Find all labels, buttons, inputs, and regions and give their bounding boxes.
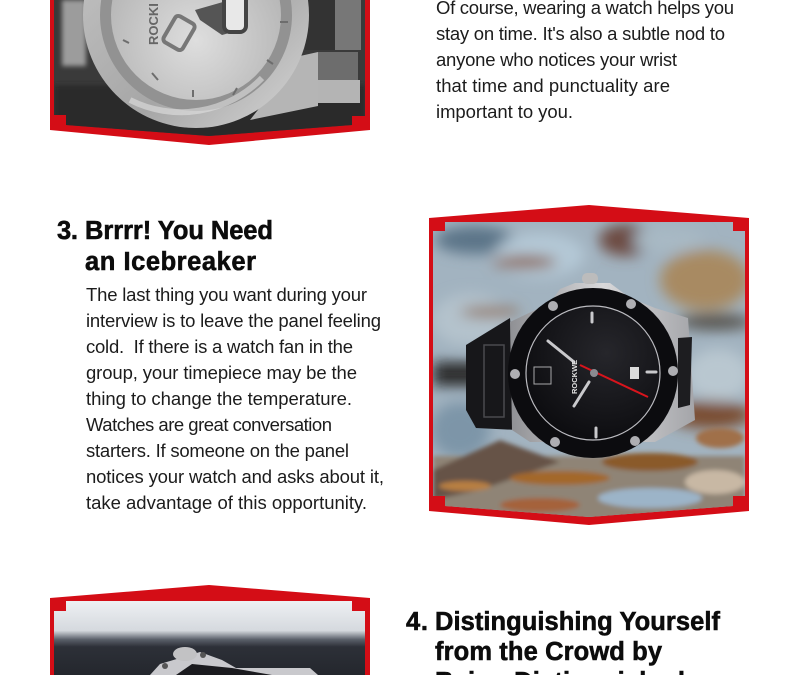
heading: section 4: Distinguishing Yourself — [435, 608, 720, 636]
text block: wearing a watch — [436, 0, 734, 122]
text block: wearing a watch: that time and punctuality are — [436, 75, 670, 96]
text block: icebreaker: thing to change the temperature. — [86, 388, 352, 409]
text block: wearing a watch: important to you. — [436, 101, 573, 122]
red frame — [429, 205, 749, 525]
text block: icebreaker: cold. If there is a watch fan in the — [86, 336, 353, 357]
text block: wearing a watch: stay on time. It's also a subtle nod to — [436, 23, 725, 44]
watch photo — [54, 601, 365, 675]
text block: icebreaker — [86, 284, 384, 513]
text block: icebreaker: starters. If someone on the panel — [86, 440, 349, 461]
photo frame: silver watch — [50, 0, 370, 145]
watch photo: ROCKWE — [570, 360, 579, 394]
heading: section 3: Brrrr! You Need — [85, 217, 273, 245]
heading: section 4: from the Crowd by — [435, 638, 663, 666]
text block: icebreaker: The last thing you want during your — [86, 284, 367, 305]
heading: section 3: 3. — [57, 217, 78, 245]
photo frame: watch on white background — [50, 585, 370, 675]
text block: icebreaker: group, your timepiece may be the — [86, 362, 357, 383]
red frame — [50, 0, 370, 145]
text block: wearing a watch: anyone who notices your wrist — [436, 49, 677, 70]
text block: icebreaker: notices your watch and asks about it, — [86, 466, 384, 487]
watch photo: ROCKI — [146, 3, 161, 45]
heading: section 3 — [57, 217, 273, 276]
watch photo — [430, 222, 753, 522]
text block: icebreaker: Watches are great conversation — [86, 414, 332, 435]
heading: section 4: 4. — [406, 608, 428, 636]
photo frame: black watch on rusty surface — [429, 205, 753, 525]
watch photo — [54, 0, 365, 140]
red frame — [50, 585, 370, 675]
text block: icebreaker: interview is to leave the panel feeling — [86, 310, 381, 331]
text block: icebreaker: take advantage of this opportunity. — [86, 492, 367, 513]
heading: section 4 — [406, 608, 720, 675]
heading: section 3: an Icebreaker — [85, 248, 256, 276]
